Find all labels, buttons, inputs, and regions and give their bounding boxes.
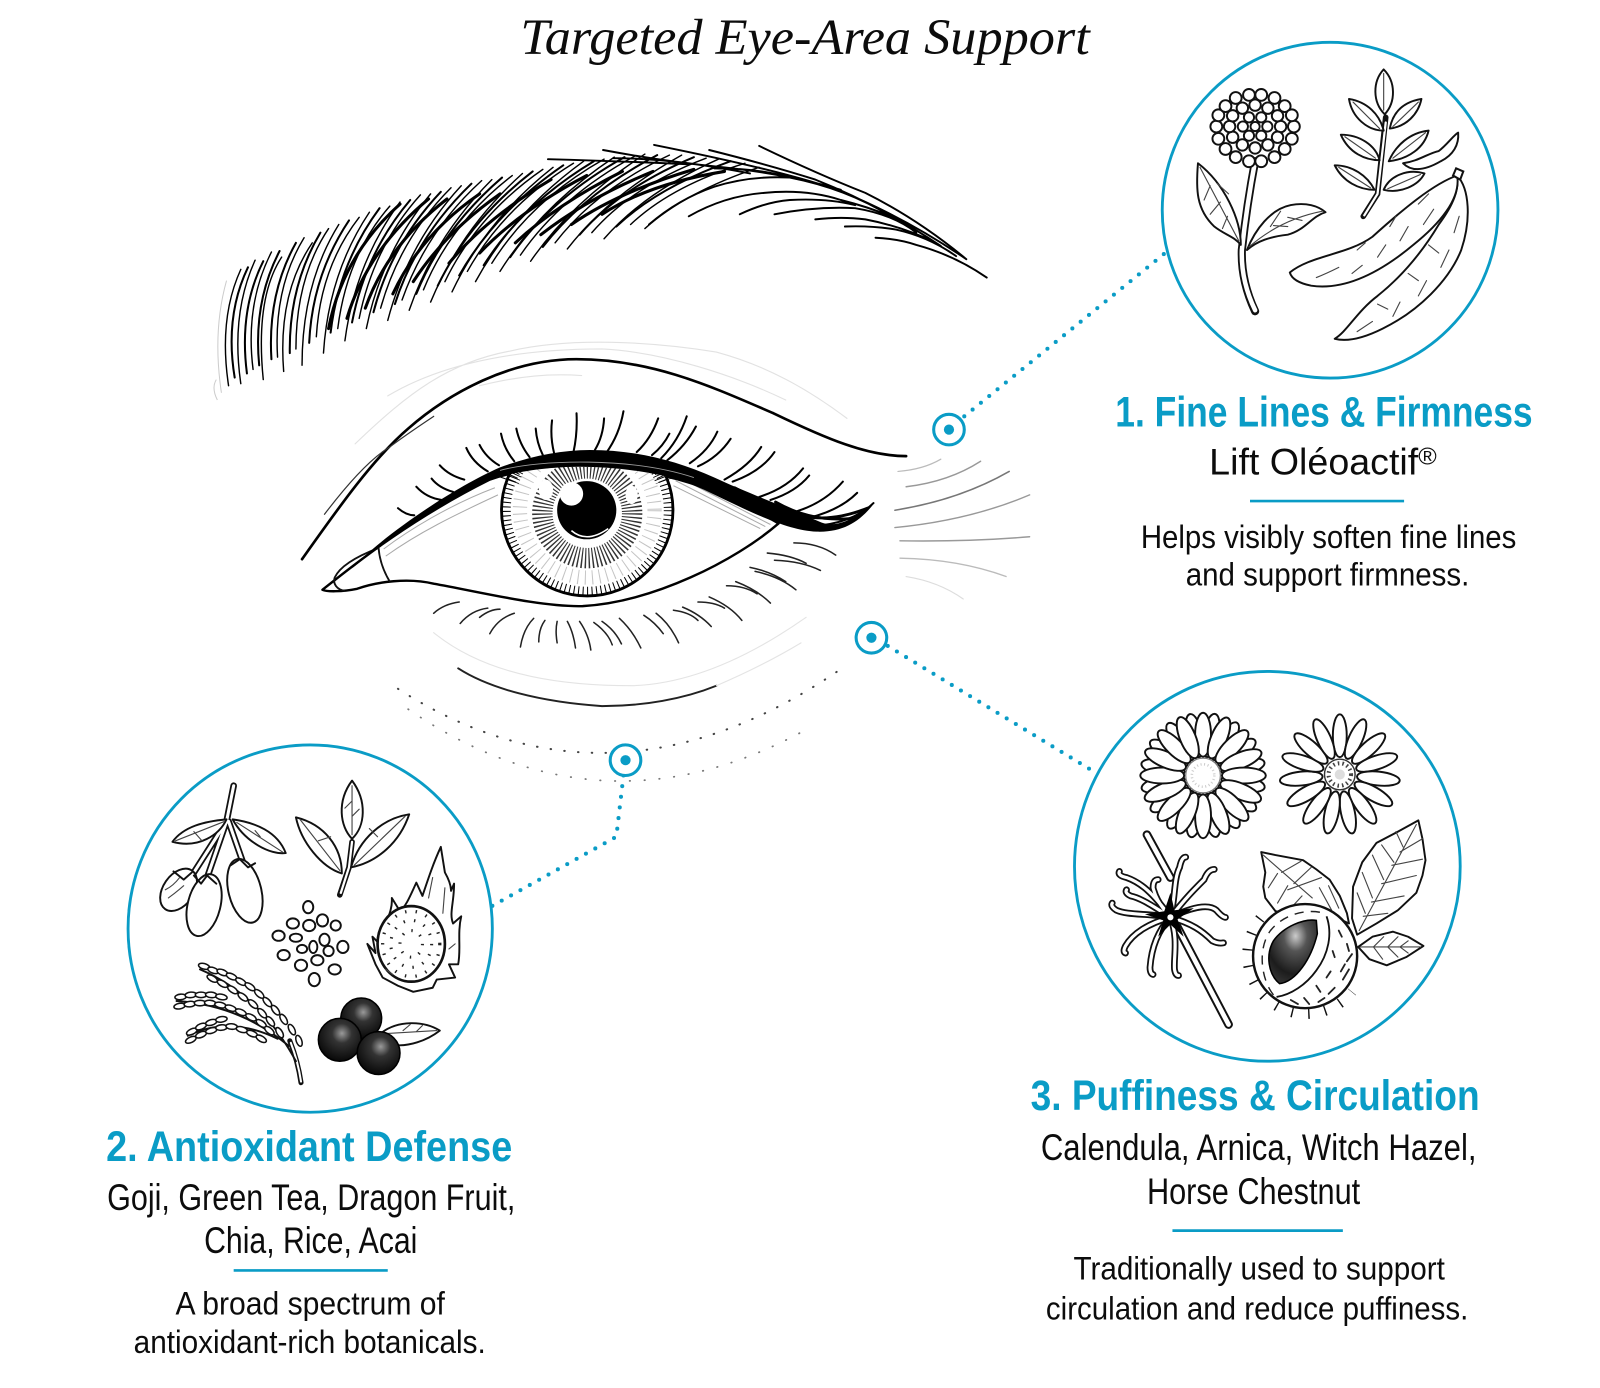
upper lid band bbox=[352, 450, 873, 568]
description 1: Helps visibly soften fine lines bbox=[1141, 519, 1516, 555]
ingredients 2 bbox=[107, 1177, 515, 1261]
marker: eye corner bbox=[934, 414, 964, 445]
heading: 3. Puffiness & Circulation: 3. Puffiness & Circulation bbox=[1031, 1072, 1480, 1120]
description 1 bbox=[1141, 519, 1516, 593]
description 3 bbox=[1046, 1251, 1468, 1326]
lower lashes bbox=[434, 543, 836, 650]
icon: leafy sprig bbox=[1335, 69, 1458, 216]
description 1: and support firmness. bbox=[1186, 557, 1469, 593]
description 2 bbox=[134, 1285, 486, 1360]
icon: arnica flower bbox=[1279, 714, 1400, 835]
icon: seed pods bbox=[1290, 168, 1468, 340]
divider 1 bbox=[1250, 500, 1404, 502]
inner eye corner bbox=[334, 548, 390, 591]
upper lashes bbox=[398, 411, 873, 527]
panel: puffiness botanical circle bbox=[1074, 671, 1460, 1061]
connector: cheek to circle 2 bbox=[492, 776, 623, 906]
marker: under-eye bbox=[856, 622, 887, 653]
connector: under-eye to circle 3 bbox=[888, 646, 1097, 773]
icon: chia seeds bbox=[272, 901, 348, 986]
ingredients 3 bbox=[1041, 1127, 1477, 1212]
iris and pupil bbox=[500, 466, 674, 598]
description 2: antioxidant-rich botanicals. bbox=[134, 1324, 486, 1360]
icon: goji berries bbox=[153, 786, 286, 940]
description 2: A broad spectrum of bbox=[176, 1285, 445, 1321]
panel: fine lines botanical circle bbox=[1162, 42, 1498, 378]
icon: witch hazel bbox=[1112, 835, 1229, 1024]
description 3: Traditionally used to support bbox=[1073, 1251, 1445, 1287]
eyebrow bbox=[214, 145, 987, 400]
icon: acai berries bbox=[318, 998, 440, 1074]
ingredient: Lift Oléoactif: ® bbox=[1418, 443, 1437, 470]
icon: horse chestnut with leaves bbox=[1247, 820, 1426, 1014]
eye bbox=[322, 411, 873, 650]
ingredients 3: Horse Chestnut bbox=[1147, 1171, 1360, 1212]
lower crease and under-eye arcs bbox=[398, 617, 842, 781]
ingredients 3: Calendula, Arnica, Witch Hazel, bbox=[1041, 1127, 1477, 1168]
connector: eye corner to circle 1 bbox=[964, 252, 1166, 416]
icon: calendula flower bbox=[1140, 712, 1266, 839]
icon: rice stalk bbox=[173, 962, 304, 1083]
marker: cheek bbox=[610, 745, 641, 776]
eye white bbox=[322, 467, 779, 606]
panel: antioxidant botanical circle bbox=[128, 745, 492, 1112]
icon: green tea sprig bbox=[296, 781, 409, 895]
title: Targeted Eye-Area Support bbox=[520, 10, 1092, 66]
ingredients 2: Goji, Green Tea, Dragon Fruit, bbox=[107, 1177, 515, 1218]
crease lines above the eye bbox=[302, 342, 906, 559]
crow's feet lines bbox=[895, 459, 1030, 599]
icon: pompom flower with leaves bbox=[1197, 89, 1326, 311]
ingredients 2: Chia, Rice, Acai bbox=[204, 1220, 417, 1261]
ingredient: Lift Oléoactif: Lift Oléoactif bbox=[1209, 441, 1413, 482]
divider 3 bbox=[1172, 1229, 1343, 1232]
divider 2 bbox=[234, 1269, 388, 1272]
description 3: circulation and reduce puffiness. bbox=[1046, 1290, 1468, 1326]
sclera shading bbox=[384, 476, 770, 556]
heading: 2. Antioxidant Defense: 2. Antioxidant Defense bbox=[106, 1123, 512, 1171]
icon: dragon fruit bbox=[367, 847, 461, 992]
